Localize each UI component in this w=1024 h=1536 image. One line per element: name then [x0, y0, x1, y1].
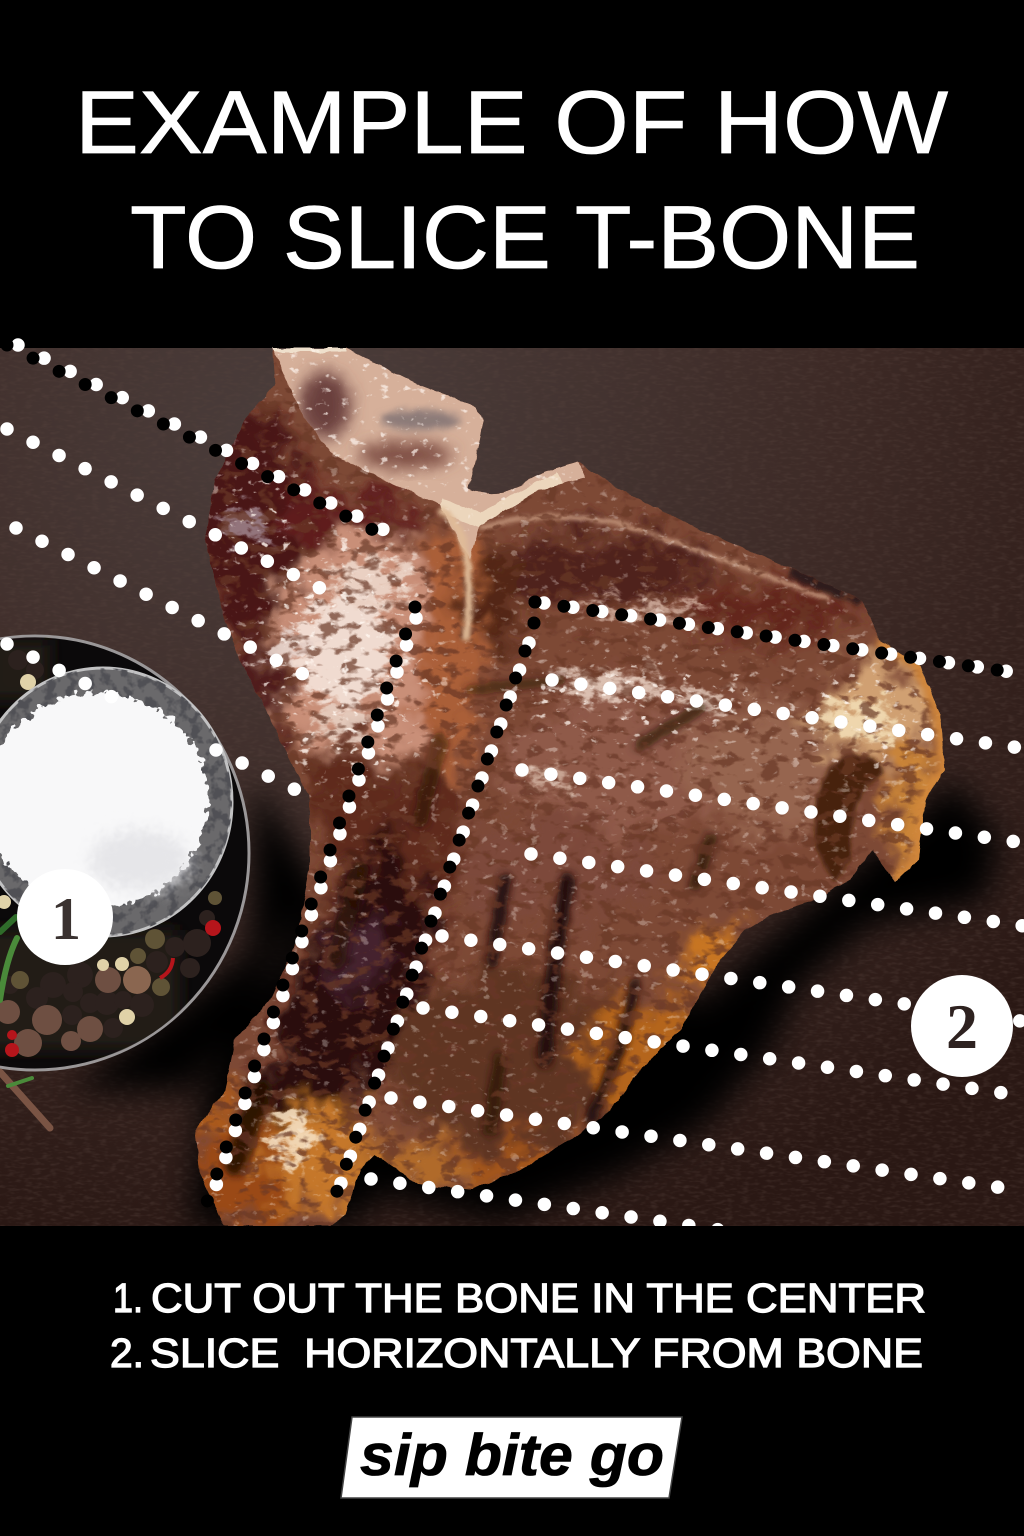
white offset dots of bone cut lines: [18, 345, 1024, 1211]
badge 1: 1: [51, 886, 81, 952]
meat dark mottling: [190, 348, 960, 1226]
dark crust at top right corner: [790, 572, 862, 600]
panel: steak photo: [0, 340, 1024, 1230]
badge 1: [17, 869, 113, 965]
cream bone edge along top right: [480, 517, 830, 600]
badge 2: [911, 975, 1013, 1077]
meat bright specks: [190, 348, 960, 1226]
wooden board background: [0, 348, 1024, 1226]
rosemary sprig: [0, 917, 50, 1128]
title: [75, 72, 948, 287]
steak colour regions: [185, 410, 941, 1230]
steak edge glow: [880, 640, 945, 882]
instructions: 2.: [110, 1330, 144, 1376]
white slice lines, right: [371, 680, 1024, 1230]
instructions: 1.: [113, 1275, 143, 1321]
dish hammered texture: [0, 660, 240, 940]
steak: [185, 340, 960, 1230]
steak base colour: [190, 348, 960, 1226]
title: TO SLICE T-BONE: [130, 187, 920, 287]
instructions: SLICE HORIZONTALLY FROM BONE: [150, 1330, 923, 1376]
plate of peppercorns and salt: [0, 636, 249, 1128]
salt: [0, 693, 209, 907]
instructions: [110, 1275, 926, 1376]
steak and bowl shadow: [70, 780, 1000, 1226]
logo: sip bite go: sip bite go: [360, 1423, 664, 1488]
black bone cut lines: [7, 345, 1024, 1225]
bone: [272, 347, 585, 560]
outer dark bowl: [0, 636, 249, 1070]
logo: sip bite go: [341, 1417, 682, 1498]
title: EXAMPLE OF HOW: [75, 72, 948, 172]
board grain: [0, 348, 1024, 1226]
instructions: CUT OUT THE BONE IN THE CENTER: [151, 1275, 926, 1321]
badge 2: 2: [946, 991, 978, 1062]
fat and gristle dark patch: [815, 755, 882, 882]
white marbling highlight: [224, 509, 896, 1163]
salt dish: [0, 668, 232, 936]
grill marks: [235, 680, 710, 1165]
peppercorns: [0, 640, 222, 1057]
white slice lines, left: [7, 429, 320, 802]
T-bone stem: [440, 510, 469, 640]
